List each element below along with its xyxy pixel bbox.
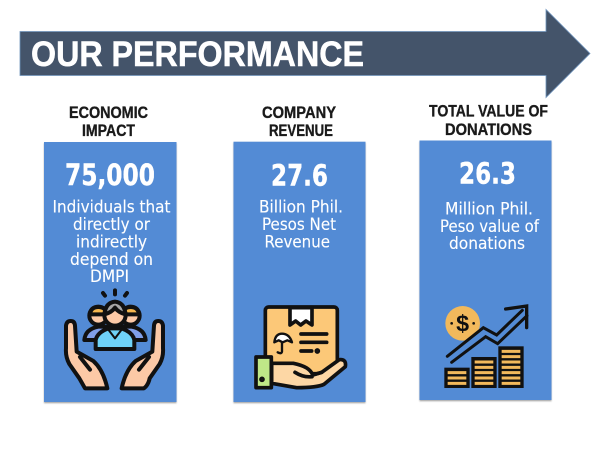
icon: hand holding package bbox=[256, 307, 346, 388]
panel: total value of donations bbox=[420, 103, 552, 400]
description: donations bbox=[449, 234, 525, 253]
heading: TOTAL VALUE OF bbox=[429, 103, 548, 121]
card background bbox=[234, 142, 366, 402]
description: Individuals that bbox=[52, 198, 171, 217]
panel: economic impact bbox=[44, 104, 176, 402]
description bbox=[440, 199, 540, 253]
description: indirectly bbox=[76, 233, 147, 252]
description: directly or bbox=[73, 215, 150, 234]
description: Billion Phil. bbox=[259, 198, 343, 217]
title: OUR PERFORMANCE bbox=[31, 35, 364, 74]
number: 27.6 bbox=[271, 159, 328, 193]
description: Peso value of bbox=[440, 217, 540, 236]
heading bbox=[262, 104, 336, 140]
description: Revenue bbox=[264, 233, 330, 252]
description bbox=[52, 198, 171, 286]
icon: hands holding people bbox=[66, 290, 163, 388]
card background bbox=[420, 140, 552, 400]
arrow shape bbox=[20, 10, 590, 98]
description: Pesos Net bbox=[262, 215, 336, 234]
number: 26.3 bbox=[459, 156, 516, 190]
icon: coin and growth chart: $ bbox=[456, 311, 469, 337]
heading: COMPANY bbox=[262, 104, 336, 122]
description: depend on bbox=[70, 250, 153, 269]
icon: coin and growth chart bbox=[445, 306, 527, 387]
card background bbox=[44, 142, 176, 402]
heading: REVENUE bbox=[269, 122, 333, 140]
heading: ECONOMIC bbox=[69, 104, 148, 122]
heading bbox=[429, 103, 548, 139]
description bbox=[259, 198, 343, 252]
description: DMPI bbox=[90, 267, 129, 286]
title arrow banner bbox=[20, 10, 590, 98]
description: Million Phil. bbox=[445, 199, 533, 218]
heading: IMPACT bbox=[82, 122, 135, 140]
heading bbox=[69, 104, 148, 140]
panel: company revenue bbox=[234, 104, 366, 402]
heading: DONATIONS bbox=[445, 121, 532, 139]
number: 75,000 bbox=[65, 158, 155, 192]
